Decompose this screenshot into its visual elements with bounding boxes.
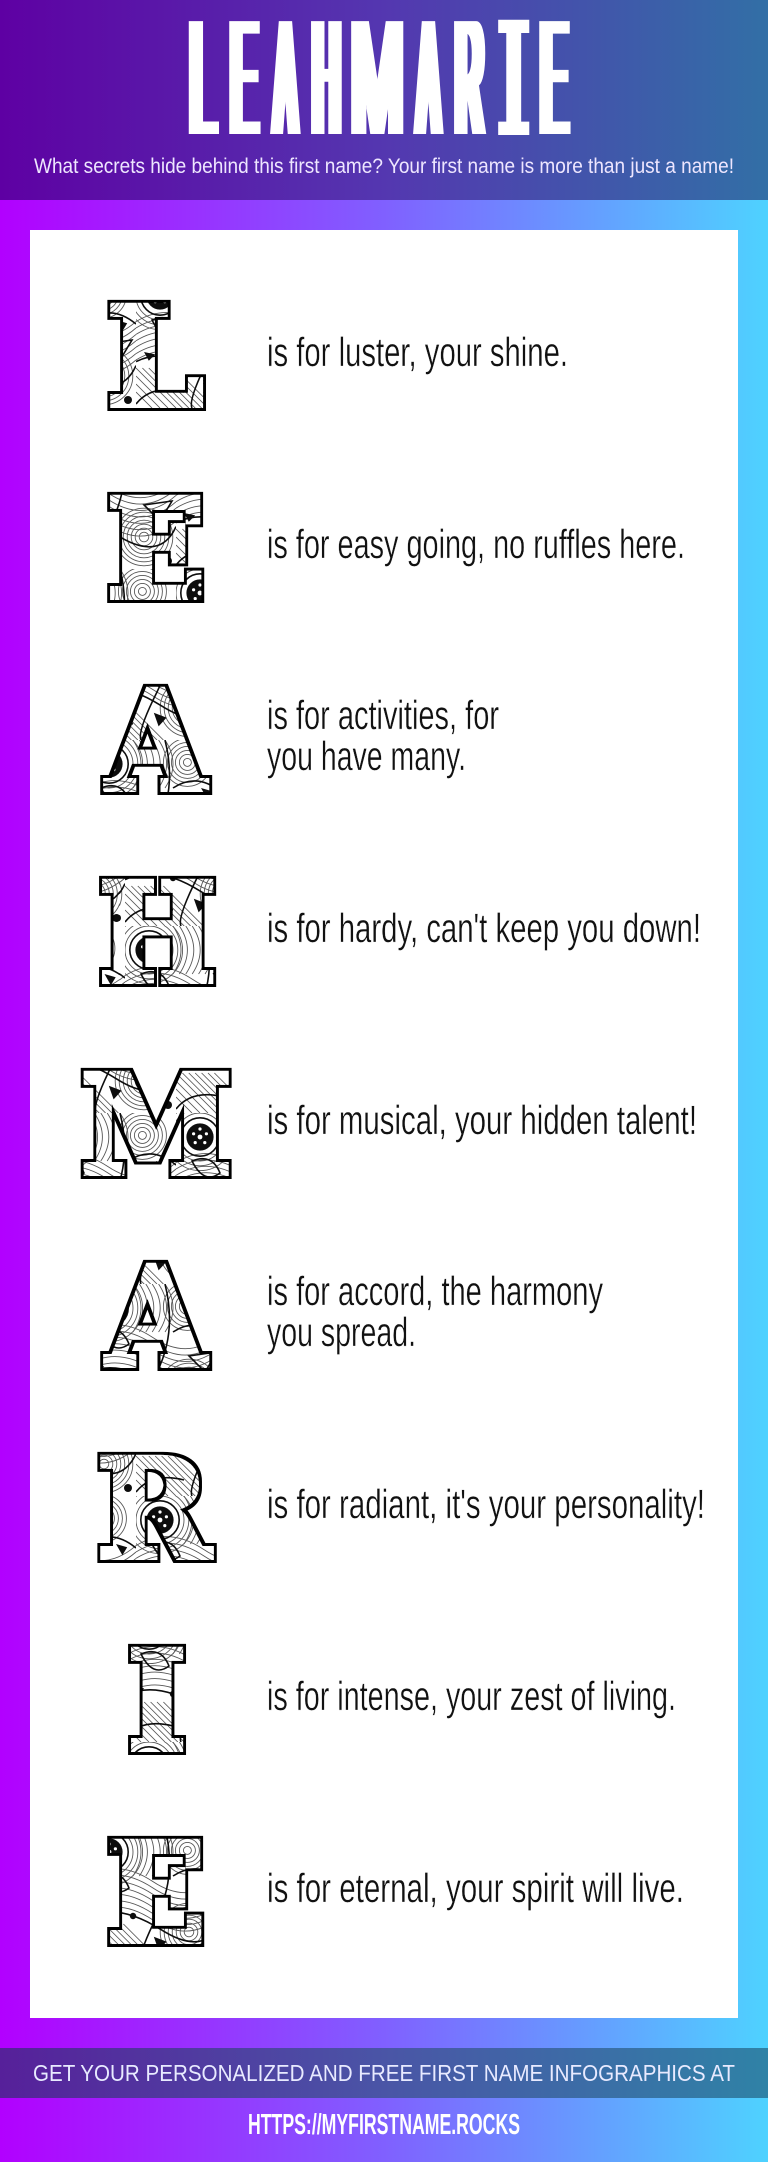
icon: letter R: R bbox=[97, 1430, 211, 1590]
row: L bbox=[107, 278, 568, 438]
icon: letter A: A bbox=[105, 1238, 207, 1398]
text: A lines: you have many. bbox=[267, 733, 466, 779]
text: A lines: you spread. bbox=[267, 1309, 416, 1355]
icon: letter L: L bbox=[107, 278, 203, 438]
icon: letter I: I bbox=[128, 1622, 186, 1782]
row: M bbox=[81, 1046, 697, 1206]
white content panel bbox=[30, 230, 738, 2018]
row: A bbox=[105, 1238, 603, 1398]
row: A bbox=[105, 662, 499, 822]
title bbox=[188, 0, 571, 188]
text: A lines: is for activities, for bbox=[267, 692, 499, 738]
footer band bbox=[0, 2048, 768, 2098]
row: I bbox=[128, 1622, 676, 1782]
row: E bbox=[107, 470, 685, 630]
icon: letter A: A bbox=[105, 662, 207, 822]
icon: letter M: M bbox=[81, 1046, 232, 1206]
icon: letter E: E bbox=[107, 1814, 205, 1974]
footer link: HTTPS://MYFIRSTNAME.ROCKS bbox=[248, 2109, 520, 2141]
row: H bbox=[99, 854, 701, 1014]
icon: letter E: E bbox=[107, 470, 205, 630]
row: E bbox=[107, 1814, 684, 1974]
text: A lines: is for accord, the harmony bbox=[267, 1268, 603, 1314]
text: L line: is for luster, your shine. bbox=[267, 329, 568, 375]
icon: letter H: H bbox=[99, 854, 216, 1014]
row: R bbox=[97, 1430, 705, 1590]
header band bbox=[0, 0, 768, 200]
